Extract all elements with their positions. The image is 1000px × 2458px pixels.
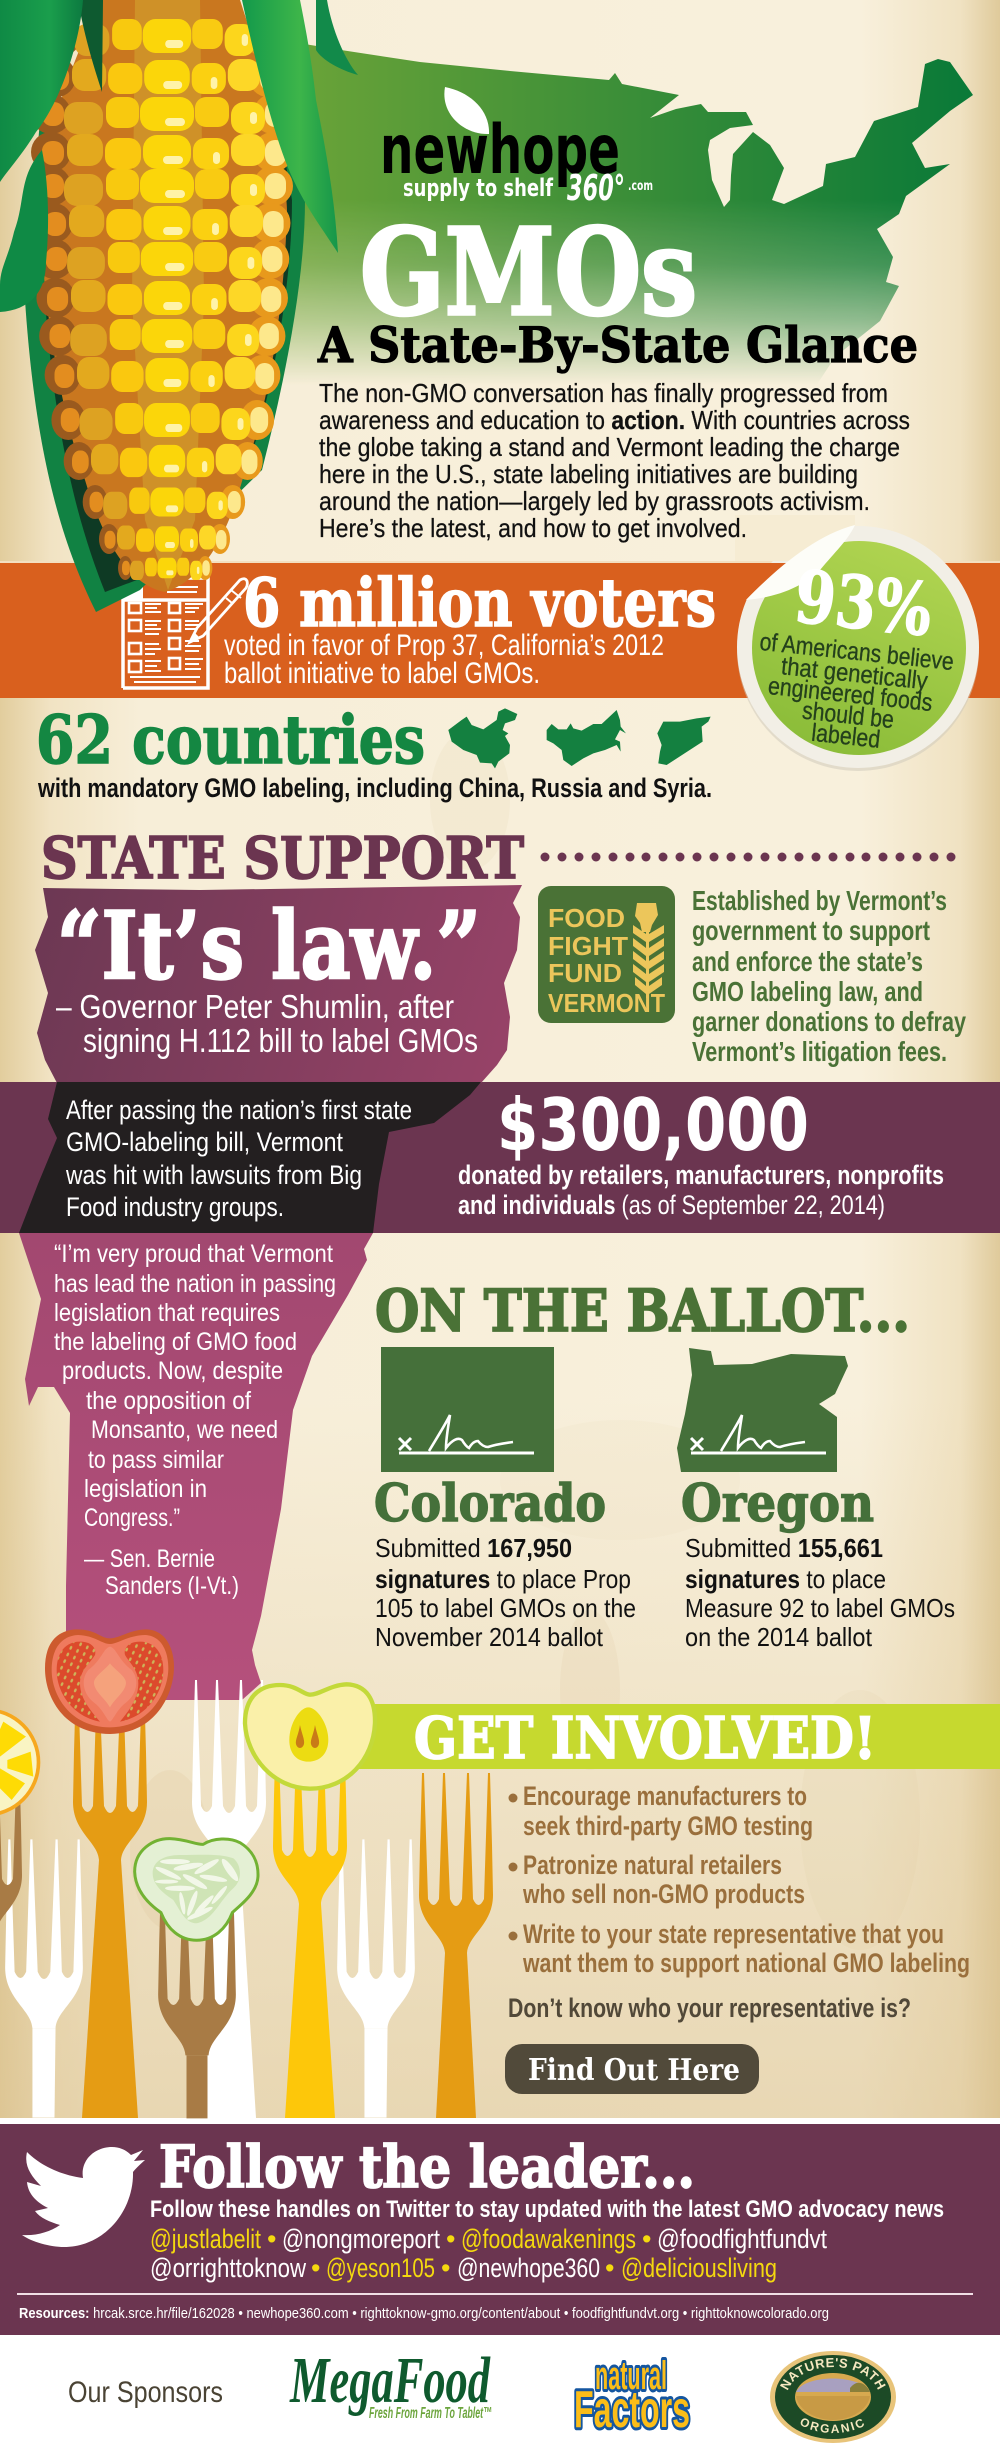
title: GMOs xyxy=(360,203,697,343)
Oregon description: Submitted 155,661 xyxy=(685,1533,883,1563)
icon: Russia xyxy=(547,710,626,766)
logo: Natural Factors: natural xyxy=(595,2354,667,2398)
icon: tomato slice xyxy=(45,1629,174,1734)
twitter handles: @foodawakenings xyxy=(461,2224,636,2254)
Colorado description xyxy=(375,1533,636,1652)
logo: newhope supply to shelf 360: .com xyxy=(628,179,653,194)
Colorado description: Submitted 167,950 xyxy=(375,1533,572,1563)
panel: Vermont lower, Sanders quote: to pass similar xyxy=(88,1446,224,1474)
Oregon description: signatures to place xyxy=(685,1564,886,1594)
logo: newhope supply to shelf 360 xyxy=(380,87,653,209)
map of the United States xyxy=(280,40,973,386)
sponsors label: Our Sponsors xyxy=(68,2376,223,2409)
twitter handles: @nongmoreport xyxy=(282,2224,440,2254)
icon: twitter bird xyxy=(22,2147,145,2247)
cob base xyxy=(40,0,287,592)
panel: plum band xyxy=(0,1082,1000,1233)
logo: Natural Factors: Factors xyxy=(574,2381,690,2439)
statistic description: and individuals (as of September 22, 2014) xyxy=(458,1190,885,1220)
panel: Vermont lower, Sanders quote: has lead the nation in passing xyxy=(54,1270,336,1298)
panel: Vermont lower, Sanders quote: Monsanto, we need xyxy=(91,1416,278,1444)
panel: Vermont top, It's law: signing H.112 bill to label GMOs xyxy=(83,1022,478,1059)
icon: ballot with pencil xyxy=(122,577,247,688)
logo: Food Fight Fund Vermont: FUND xyxy=(548,958,622,988)
sticker: 93% of Americans: of Americans believe xyxy=(758,628,955,676)
resources: Resources: hrcak.srce.hr/file/162028 • newhope360.com • righttoknow-gmo.org/content/about • foodfightfundvt.org • righttoknowcolorado.org xyxy=(19,2305,829,2322)
icon: white leaf xyxy=(444,87,489,134)
twitter handles: @foodfightfundvt xyxy=(657,2224,827,2254)
headline: 6 million voters: 6 million voters xyxy=(243,564,716,642)
voters description: ballot initiative to label GMOs. xyxy=(224,657,540,690)
sticker: 93% of Americans: labeled xyxy=(810,719,882,754)
headline: 62 countries: 62 countries xyxy=(36,701,425,779)
logo: Food Fight Fund Vermont: VERMONT xyxy=(548,988,665,1018)
panel: Vermont top, It's law: – Governor Peter Shumlin, after xyxy=(56,988,454,1025)
Food Fight Fund description: government to support xyxy=(692,915,930,946)
icon: Oregon state xyxy=(677,1348,848,1472)
Food Fight Fund description xyxy=(692,885,966,1067)
logo: newhope supply to shelf 360: supply to shelf xyxy=(403,174,553,202)
logo: Food Fight Fund Vermont: FOOD xyxy=(548,903,625,933)
sticker: 93% of Americans: 93% xyxy=(791,553,936,652)
voters description xyxy=(224,629,664,690)
panel: Vermont top, It's law: “It’s law.” xyxy=(57,891,481,1000)
panel: Vermont middle, lawsuits: Food industry groups. xyxy=(66,1192,284,1222)
panel: orange voters band xyxy=(0,561,1000,698)
Food Fight Fund description: and enforce the state’s xyxy=(692,946,923,977)
food slices xyxy=(0,1629,375,1940)
dotted rule xyxy=(540,852,956,862)
logo: newhope supply to shelf 360: 360° xyxy=(567,168,625,209)
logo: Nature's Path: NATURE'S PATH xyxy=(780,2358,886,2390)
Oregon description: Measure 92 to label GMOs xyxy=(685,1593,955,1623)
twitter handles: @newhope360 xyxy=(457,2253,600,2283)
twitter handles: • xyxy=(311,2253,320,2283)
icon: cucumber slice xyxy=(135,1839,258,1940)
logo: MegaFood: Fresh From Farm To Tablet™ xyxy=(369,2405,492,2422)
button: find out here: Find Out Here xyxy=(528,2053,740,2088)
statistic: $300,000: $300,000 xyxy=(497,1083,809,1167)
kernels xyxy=(31,16,293,580)
logo: Natural Factors xyxy=(574,2354,690,2439)
panel: Vermont middle, lawsuits: After passing the nation’s first state xyxy=(66,1095,412,1125)
panel: Vermont lower, Sanders quote: Sanders (I-Vt.) xyxy=(105,1572,239,1600)
twitter handles: @justlabelit xyxy=(150,2224,261,2254)
peeled corner xyxy=(735,515,855,561)
panel: Vermont lower, Sanders quote: legislation that requires xyxy=(54,1299,280,1327)
intro paragraph xyxy=(319,378,910,543)
icon: Syria xyxy=(657,717,711,765)
intro paragraph: awareness and education to action. With countries across xyxy=(319,405,910,435)
logo: Nature's Path xyxy=(770,2351,896,2443)
Oregon description: on the 2014 ballot xyxy=(685,1622,873,1652)
list: ways to get involved: Encourage manufacturers to xyxy=(523,1781,807,1811)
voters description: voted in favor of Prop 37, California’s 2012 xyxy=(224,629,664,662)
panel: Vermont lower, Sanders quote: — Sen. Bernie xyxy=(84,1545,215,1573)
panel: Vermont lower, Sanders quote: Congress.” xyxy=(84,1504,180,1532)
twitter handles: @yeson105 xyxy=(326,2253,435,2283)
heading: on the ballot: ON THE BALLOT... xyxy=(375,1277,910,1345)
panel: Vermont middle, lawsuits xyxy=(19,1082,481,1233)
statistic description xyxy=(458,1160,944,1220)
logo: Nature's Path: ORGANIC xyxy=(800,2418,864,2434)
panel: Vermont top, It's law xyxy=(35,885,522,1083)
heading: Colorado: Colorado xyxy=(374,1474,606,1534)
heading: state support: STATE SUPPORT xyxy=(41,825,524,892)
husk back xyxy=(25,120,305,612)
logo: MegaFood: MegaFood xyxy=(289,2344,491,2417)
banner: get involved: GET INVOLVED! xyxy=(414,1705,876,1772)
panel: Vermont lower, Sanders quote: legislation in xyxy=(84,1475,207,1503)
intro paragraph: around the nation—largely led by grassroots activism. xyxy=(319,486,870,516)
sticker: 93% of Americans: should be xyxy=(801,697,895,734)
forks xyxy=(0,1680,493,2118)
Colorado description: signatures to place Prop xyxy=(375,1564,631,1594)
list: ways to get involved xyxy=(508,1781,970,1978)
heading: Oregon: Oregon xyxy=(681,1474,874,1534)
sticker: 93% of Americans xyxy=(735,515,979,771)
logo: MegaFood xyxy=(289,2344,492,2422)
list: ways to get involved: who sell non-GMO products xyxy=(522,1879,805,1909)
twitter handles: • xyxy=(605,2253,614,2283)
Oregon description xyxy=(685,1533,955,1652)
panel: Vermont lower, Sanders quote: products. Now, despite xyxy=(62,1357,283,1385)
icon: apple slice xyxy=(245,1684,375,1789)
twitter handles: • xyxy=(446,2224,455,2254)
panel: Vermont lower, Sanders quote: “I’m very proud that Vermont xyxy=(54,1240,333,1268)
intro paragraph: here in the U.S., state labeling initiatives are building xyxy=(319,459,858,489)
Colorado description: November 2014 ballot xyxy=(375,1622,604,1652)
icon: China xyxy=(448,708,517,768)
panel: Vermont middle, lawsuits: GMO-labeling bill, Vermont xyxy=(66,1127,343,1157)
list: ways to get involved: seek third-party GMO testing xyxy=(523,1811,813,1841)
intro paragraph: the globe taking a stand and Vermont leading the charge xyxy=(319,432,900,462)
panel: Vermont lower, Sanders quote xyxy=(19,1233,373,1700)
list: ways to get involved: Patronize natural retailers xyxy=(523,1850,782,1880)
intro paragraph: Here’s the latest, and how to get involved. xyxy=(319,513,747,543)
husk leaves xyxy=(0,150,48,312)
icons: China, Russia and Syria xyxy=(448,708,711,768)
Food Fight Fund description: GMO labeling law, and xyxy=(692,976,923,1007)
twitter handles: • xyxy=(441,2253,450,2283)
icon: Colorado state xyxy=(381,1347,554,1472)
countries description: with mandatory GMO labeling, including China, Russia and Syria. xyxy=(37,773,712,803)
twitter handles: • xyxy=(267,2224,276,2254)
logo: Food Fight Fund Vermont: FIGHT xyxy=(548,931,628,961)
sticker: 93% of Americans: engineered foods xyxy=(767,672,934,717)
icon: lemon slice xyxy=(0,1708,40,1817)
panel: Vermont middle, lawsuits: was hit with lawsuits from Big xyxy=(65,1160,362,1190)
twitter handles xyxy=(150,2224,827,2283)
heading: follow the leader: Follow the leader... xyxy=(159,2133,695,2201)
panel: follow the leader xyxy=(0,2124,1000,2335)
panel: Vermont lower, Sanders quote: the opposition of xyxy=(86,1387,251,1415)
corn cob with husk xyxy=(0,0,358,612)
intro paragraph: The non-GMO conversation has finally progressed from xyxy=(319,378,888,408)
Colorado description: 105 to label GMOs on the xyxy=(375,1593,636,1623)
sticker: 93% of Americans: that genetically xyxy=(780,652,929,695)
logo: newhope supply to shelf 360: newhope xyxy=(380,111,620,190)
twitter handles: @orrighttoknow xyxy=(150,2253,306,2283)
button: find out here xyxy=(505,2044,759,2094)
subtitle: A State-By-State Glance xyxy=(317,316,918,374)
icon: fist and wheat xyxy=(633,903,664,998)
panel: Vermont lower, Sanders quote: the labeling of GMO food xyxy=(54,1328,297,1356)
twitter handles: @deliciousliving xyxy=(621,2253,777,2283)
twitter handles: • xyxy=(642,2224,651,2254)
logo: Food Fight Fund Vermont xyxy=(538,886,675,1023)
